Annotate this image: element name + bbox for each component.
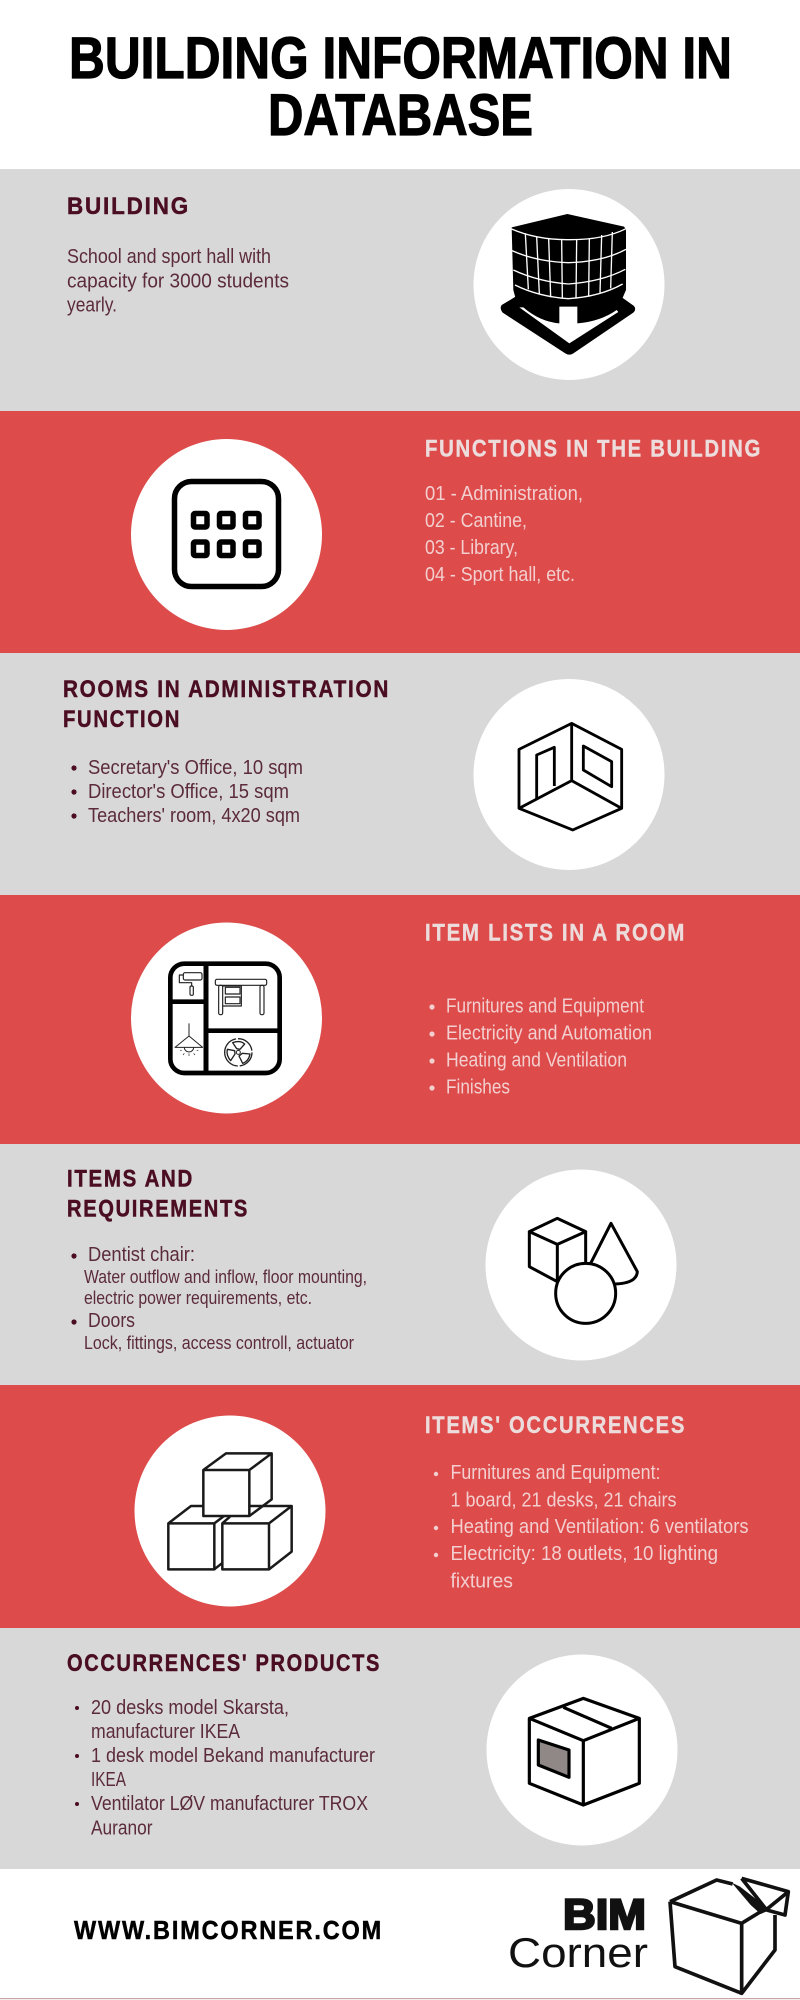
list: rooms: Secretary's Office, 10 sqm: [88, 756, 303, 779]
heading: items and requirements: REQUIREMENTS: [67, 1196, 249, 1222]
list: occurrences: [434, 1461, 748, 1592]
list: occurrences: Furnitures and Equipment:: [450, 1461, 660, 1484]
panel: functions in the building: [0, 411, 800, 653]
list: products: [75, 1696, 375, 1840]
list: items and requirements: [71, 1243, 367, 1353]
list: item lists: Electricity and Automation: [446, 1022, 652, 1044]
heading: items and requirements: [67, 1166, 249, 1222]
panel: occurrences' products: [0, 1628, 800, 1869]
panel: rooms in administration function: [0, 653, 800, 895]
text: functions list: [425, 482, 583, 586]
list: products: Auranor: [91, 1816, 153, 1840]
panel: items' occurrences: [0, 1385, 800, 1628]
list: item lists: Finishes: [446, 1076, 510, 1098]
list: rooms: [71, 756, 303, 827]
heading: rooms in administration function: ROOMS IN ADMINISTRATION: [63, 676, 390, 703]
list: products: 20 desks model Skarsta,: [91, 1696, 289, 1719]
list: items and requirements: Dentist chair:: [88, 1243, 195, 1266]
list: item lists: [429, 994, 652, 1098]
list: occurrences: Heating and Ventilation: 6 ventilators: [450, 1515, 748, 1538]
list: item lists: Heating and Ventilation: [446, 1048, 627, 1072]
title: DATABASE: [268, 83, 533, 148]
icon: cube, cone and sphere: [486, 1170, 676, 1360]
logo: BIM Corner: BIM: [563, 1891, 646, 1939]
icon: stacked cubes: [134, 1416, 326, 1606]
list: items and requirements: electric power requirements, etc.: [84, 1288, 312, 1308]
list: item lists: Furnitures and Equipment: [446, 994, 644, 1018]
panel: item lists in a room: [0, 895, 800, 1144]
icon: building on arrow base: [474, 189, 664, 380]
heading: items' occurrences: ITEMS' OCCURRENCES: [425, 1412, 686, 1439]
list: rooms: Teachers' room, 4x20 sqm: [88, 804, 300, 827]
list: products: Ventilator LØV manufacturer TROX: [91, 1792, 368, 1815]
icon: isometric room: [474, 679, 664, 870]
heading: occurrences' products: OCCURRENCES' PRODUCTS: [67, 1650, 381, 1677]
text: building description: [67, 245, 289, 316]
icon: product box with label: [486, 1654, 678, 1846]
footer: [74, 1878, 788, 1993]
text: building description: School and sport hall with: [67, 245, 271, 268]
text: functions list: 04 - Sport hall, etc.: [425, 563, 575, 586]
list: items and requirements: Lock, fittings, access controll, actuator: [84, 1333, 354, 1353]
list: occurrences: 1 board, 21 desks, 21 chairs: [450, 1488, 676, 1512]
text: functions list: 03 - Library,: [425, 536, 518, 559]
icon: app grid: [131, 439, 322, 630]
text: functions list: 01 - Administration,: [425, 482, 583, 505]
website address: WWW.BIMCORNER.COM: [74, 1917, 383, 1945]
list: products: 1 desk model Bekand manufacturer: [91, 1744, 375, 1767]
logo: BIM Corner: [508, 1878, 788, 1993]
list: products: manufacturer IKEA: [91, 1720, 240, 1743]
heading: item lists in a room: ITEM LISTS IN A ROOM: [425, 920, 686, 946]
heading: rooms in administration function: FUNCTION: [63, 706, 181, 733]
panel: items and requirements: [0, 1144, 800, 1385]
heading: building: BUILDING: [67, 193, 190, 220]
heading: items and requirements: ITEMS AND: [67, 1166, 194, 1192]
text: functions list: 02 - Cantine,: [425, 509, 527, 532]
icon: room items grid: [131, 922, 322, 1114]
list: items and requirements: Water outflow and inflow, floor mounting,: [84, 1267, 367, 1287]
list: products: IKEA: [91, 1768, 126, 1791]
text: building description: yearly.: [67, 294, 117, 316]
text: building description: capacity for 3000 students: [67, 270, 289, 292]
title: [69, 26, 732, 148]
logo: BIM Corner: Corner: [508, 1929, 648, 1976]
list: items and requirements: Doors: [88, 1309, 135, 1332]
panel: building: [0, 169, 800, 411]
list: occurrences: fixtures: [450, 1570, 513, 1592]
list: rooms: Director's Office, 15 sqm: [88, 780, 289, 803]
list: occurrences: Electricity: 18 outlets, 10 lighting: [450, 1542, 718, 1565]
heading: rooms in administration function: [63, 676, 390, 733]
